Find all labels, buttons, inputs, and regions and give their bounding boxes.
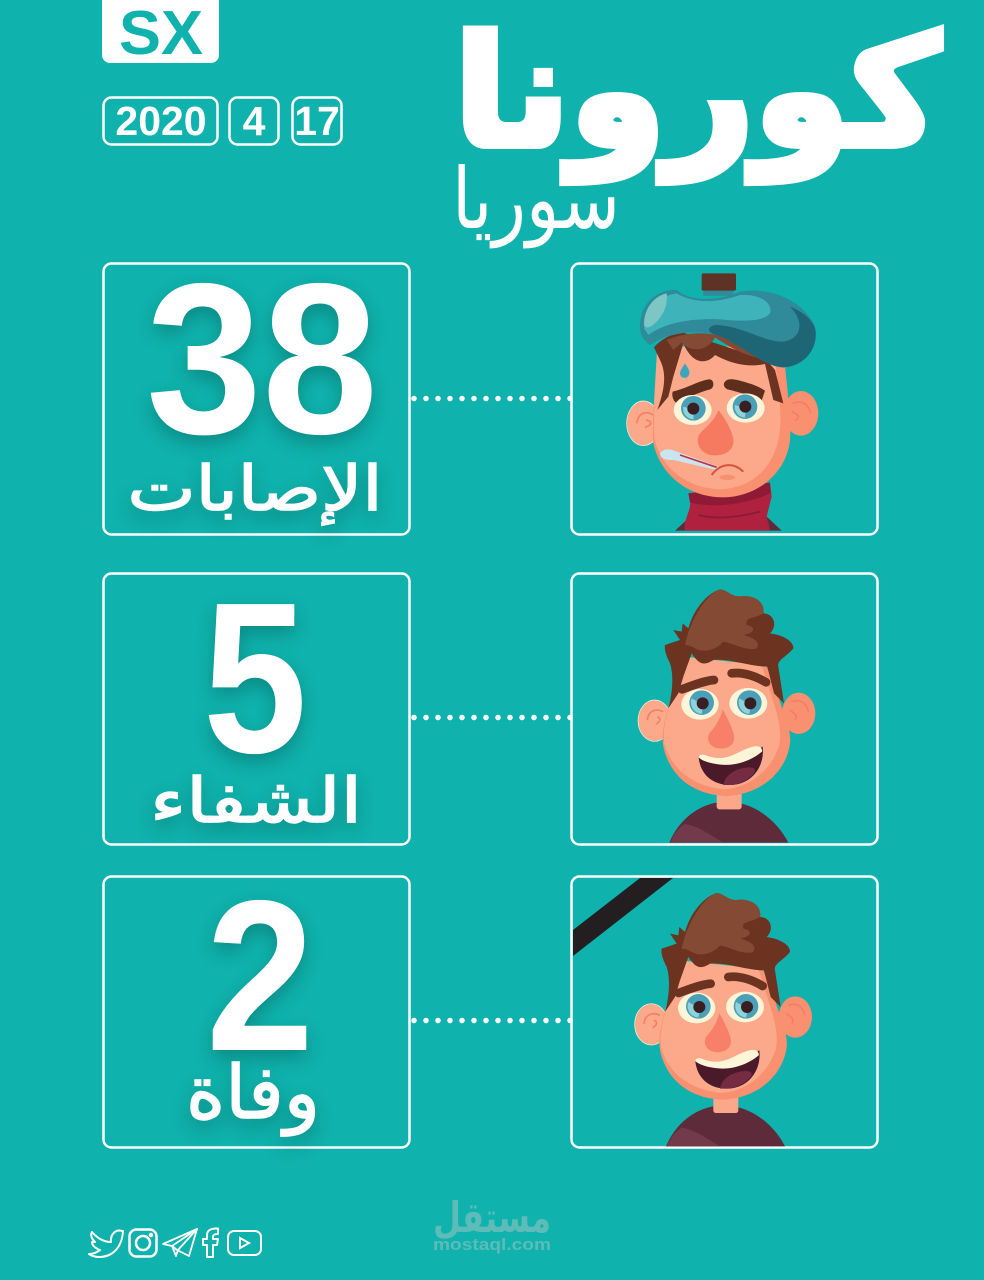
illustration: boy [635, 893, 812, 1146]
illustration: smiling boy [638, 589, 815, 843]
watermark: mostaql [433, 1193, 551, 1254]
connector: deaths [414, 1018, 571, 1023]
panel: sick character [572, 264, 878, 534]
connector: recoveries [414, 715, 571, 720]
title: كورونا [454, 4, 941, 182]
logo: SX [119, 0, 203, 68]
icon: instagram [130, 1230, 156, 1256]
icon: youtube [228, 1231, 261, 1255]
mourning ribbon [573, 878, 673, 956]
subtitle: سوريا [452, 150, 620, 249]
deaths label: وفاة [186, 1050, 320, 1136]
date badges: 2020 [115, 98, 207, 144]
watermark: mostaql: مستقل [433, 1193, 551, 1242]
date badges: 17 [294, 98, 340, 144]
connector: injuries [414, 396, 571, 401]
injuries label: الإصابات [128, 452, 382, 526]
panel: deaths [104, 855, 410, 1148]
panel: recoveries [104, 557, 410, 844]
date badges: 4 [243, 98, 266, 144]
panel: mourning character [572, 876, 878, 1148]
icon: facebook [203, 1228, 218, 1257]
panel: happy character [572, 574, 878, 844]
recoveries number: 5 [203, 557, 307, 798]
panel: injuries [104, 238, 410, 534]
watermark: mostaql: mostaql.com [433, 1235, 551, 1254]
injuries number: 38 [146, 238, 378, 479]
recoveries label: الشفاء [150, 764, 362, 837]
deaths number: 2 [206, 855, 314, 1096]
date badges [104, 98, 342, 144]
illustration: sick boy with ice bag [627, 273, 818, 531]
icon: twitter [89, 1231, 123, 1257]
icon: telegram [163, 1229, 197, 1256]
